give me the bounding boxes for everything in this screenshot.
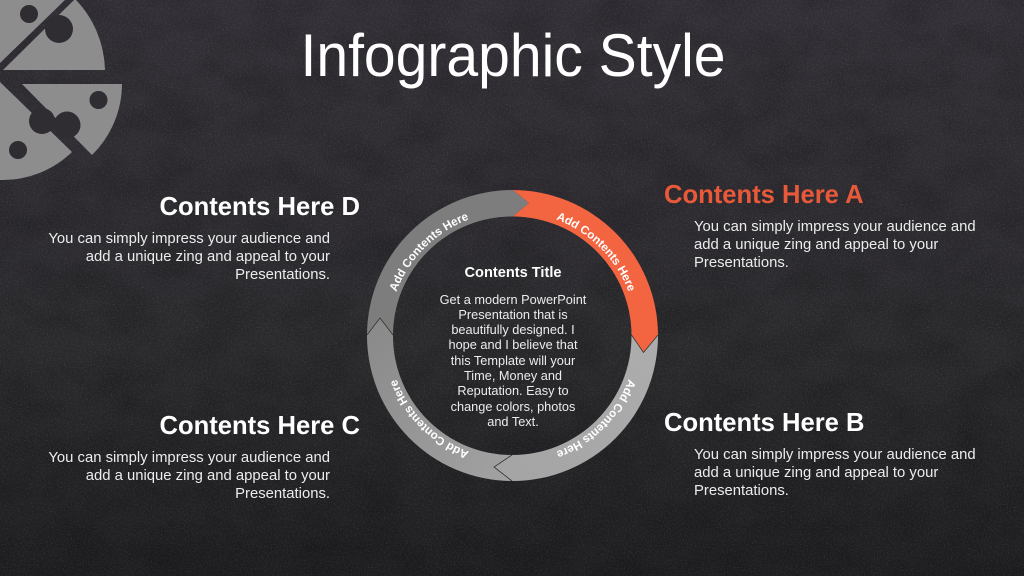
text C: Presentations. bbox=[235, 486, 330, 502]
text D: Presentations. bbox=[235, 267, 330, 283]
heading D: Contents Here D bbox=[159, 193, 360, 221]
center text: beautifully designed. I bbox=[451, 322, 575, 337]
text B bbox=[694, 447, 976, 499]
text C: You can simply impress your audience and bbox=[48, 450, 330, 466]
text D bbox=[48, 231, 330, 283]
center text: Time, Money and bbox=[464, 368, 562, 383]
text A: You can simply impress your audience and bbox=[694, 219, 976, 235]
center text: Reputation. Easy to bbox=[457, 383, 569, 398]
text B: add a unique zing and appeal to your bbox=[694, 465, 938, 481]
center text: Presentation that is bbox=[458, 307, 568, 322]
center text: change colors, photos bbox=[451, 399, 575, 414]
segment B bbox=[494, 336, 658, 481]
text D: You can simply impress your audience and bbox=[48, 231, 330, 247]
center text bbox=[440, 292, 586, 429]
center heading: Contents Title bbox=[464, 265, 562, 281]
segment D bbox=[367, 190, 529, 334]
title: Infographic Style bbox=[300, 22, 726, 89]
segment A: Add Contents Here bbox=[556, 213, 634, 291]
text A: add a unique zing and appeal to your bbox=[694, 237, 938, 253]
segment C bbox=[367, 318, 512, 481]
text D: add a unique zing and appeal to your bbox=[86, 249, 330, 265]
center text: and Text. bbox=[487, 414, 539, 429]
segment D: Add Contents Here bbox=[390, 214, 468, 292]
segment A bbox=[513, 190, 658, 353]
heading A: Contents Here A bbox=[664, 181, 864, 209]
text C bbox=[48, 450, 330, 502]
text B: Presentations. bbox=[694, 483, 789, 499]
center text: Get a modern PowerPoint bbox=[440, 292, 586, 306]
text C: add a unique zing and appeal to your bbox=[86, 468, 330, 484]
center text: this Template will your bbox=[451, 353, 575, 368]
icon: pizza slices bbox=[0, 0, 122, 180]
text A: Presentations. bbox=[694, 255, 789, 271]
center text: hope and I believe that bbox=[448, 337, 578, 352]
segment B: Add Contents Here bbox=[557, 379, 635, 457]
text B: You can simply impress your audience and bbox=[694, 447, 976, 463]
heading C: Contents Here C bbox=[159, 412, 360, 440]
text A bbox=[694, 219, 976, 271]
segment C: Add Contents Here bbox=[391, 380, 469, 458]
heading B: Contents Here B bbox=[664, 409, 865, 437]
